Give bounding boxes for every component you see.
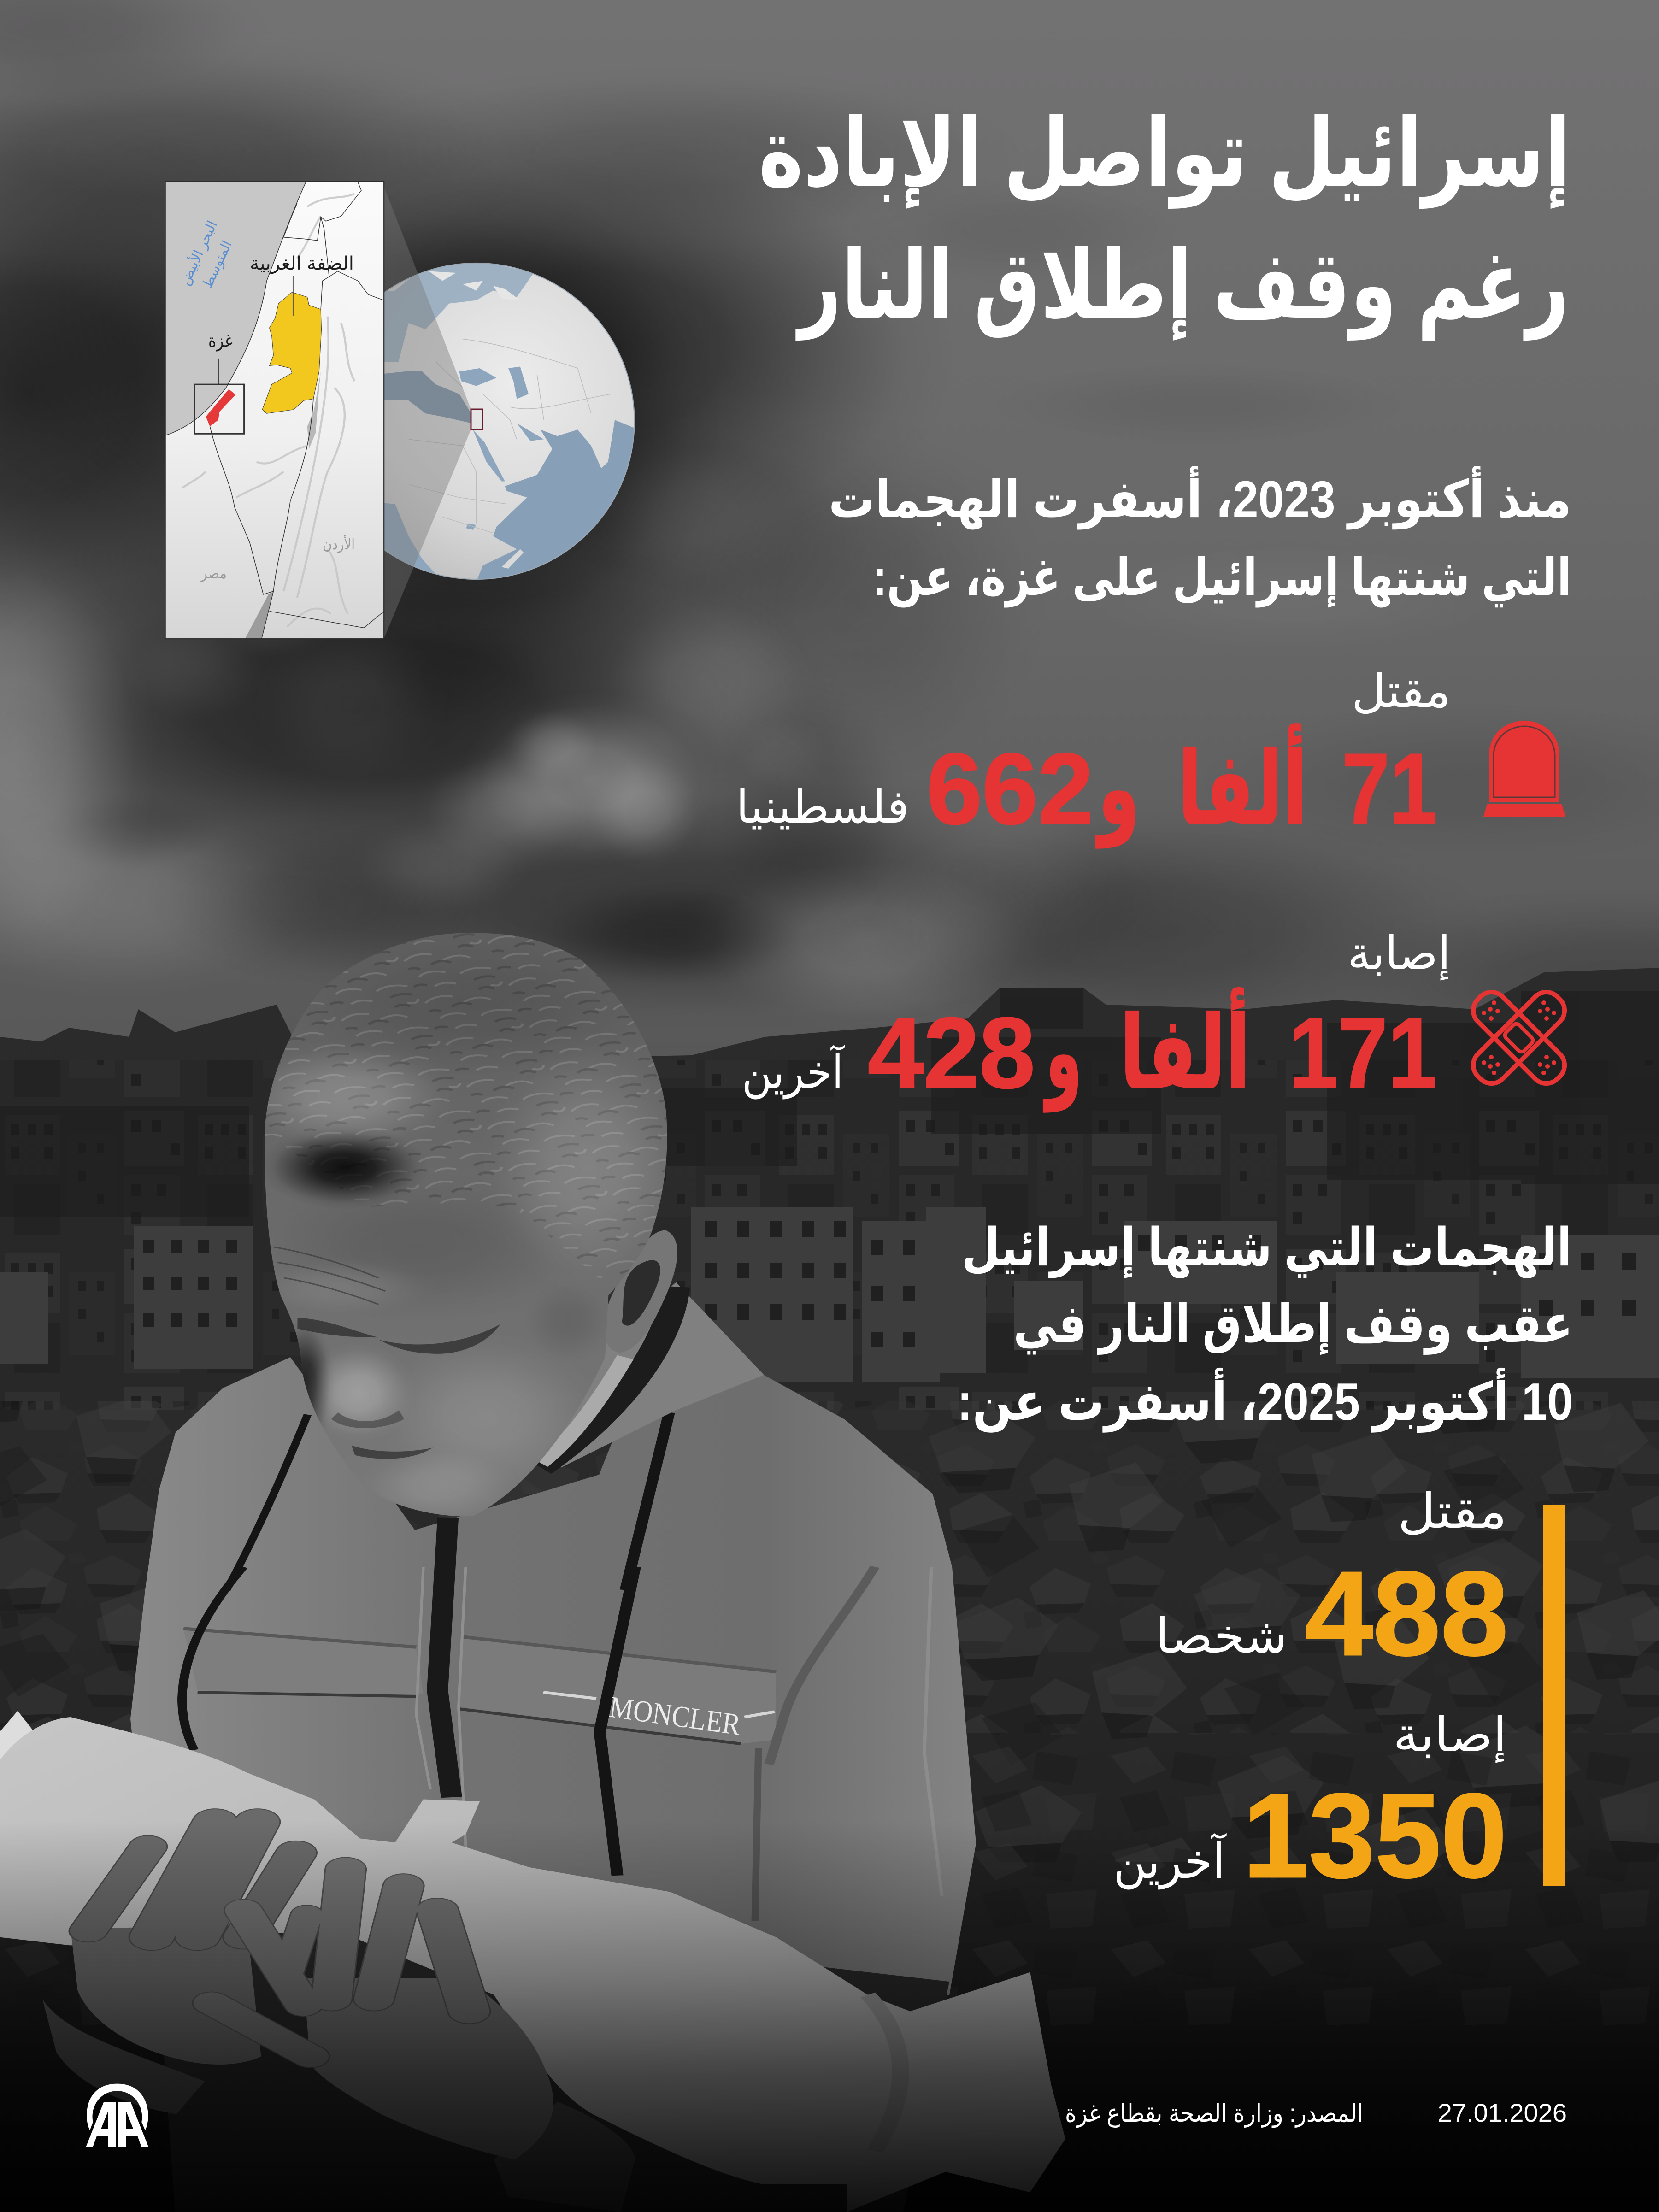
west bank bbox=[262, 292, 322, 413]
locator map and globe: الأردن bbox=[323, 535, 355, 553]
jacket logo text: MONCLER bbox=[607, 1690, 742, 1742]
ceasefire paragraph: 10 أكتوبر 2025، أسفرت عن: bbox=[957, 1367, 1573, 1433]
gaza strip bbox=[206, 389, 235, 426]
stat: injured since 2023 bbox=[742, 928, 1451, 1112]
background: ruined city skyline and camp bbox=[0, 968, 1659, 2212]
stat: killed after ceasefire: شخصا bbox=[1155, 1610, 1288, 1663]
globe shadow bbox=[228, 172, 725, 670]
stat: injured since 2023: آخرين bbox=[742, 1045, 845, 1100]
stat: injured after ceasefire bbox=[1113, 1708, 1507, 1903]
hands bbox=[42, 1822, 635, 2212]
stat: killed after ceasefire: 488 bbox=[1305, 1547, 1508, 1681]
icon: gravestone bbox=[1483, 721, 1565, 817]
head bbox=[230, 925, 764, 1525]
icon: crossed bandages bbox=[1467, 986, 1571, 1090]
date: 27.01.2026 bbox=[1438, 2098, 1567, 2127]
bottom darkening gradient bbox=[0, 1820, 1659, 2212]
stat: injured since 2023: 171 bbox=[1288, 997, 1437, 1109]
stat: injured since 2023: 428 bbox=[868, 997, 1035, 1109]
stat: killed after ceasefire: مقتل bbox=[1398, 1485, 1507, 1538]
globe bbox=[384, 263, 635, 580]
locator map and globe: البحر الأبيض bbox=[176, 218, 220, 288]
logo: Anadolu Agency bbox=[86, 2084, 149, 2147]
person: man holding wrapped child bbox=[0, 925, 1065, 2212]
intro paragraph bbox=[829, 466, 1571, 608]
source: المصدر: وزارة الصحة بقطاع غزة bbox=[1065, 2100, 1363, 2128]
forehead wrinkles bbox=[274, 1247, 385, 1304]
locator map and globe: المتوسط bbox=[200, 238, 235, 291]
map panel bbox=[165, 181, 384, 639]
title bbox=[759, 100, 1571, 341]
stat: injured after ceasefire: آخرين bbox=[1113, 1833, 1227, 1890]
gaza marker on globe bbox=[471, 409, 482, 429]
stat: injured since 2023: ألفا bbox=[1120, 988, 1250, 1109]
intro paragraph: منذ أكتوبر 2023، أسفرت الهجمات bbox=[829, 466, 1571, 529]
jacket bbox=[130, 1282, 976, 2212]
stat: killed after ceasefire bbox=[1155, 1485, 1508, 1681]
stat: killed since 2023: 71 bbox=[1342, 733, 1437, 845]
building windows bbox=[143, 1221, 1636, 1347]
stat: injured after ceasefire: إصابة bbox=[1393, 1708, 1507, 1763]
ceasefire paragraph bbox=[957, 1218, 1573, 1433]
zoom wedge bbox=[384, 187, 471, 639]
stat: killed since 2023: مقتل bbox=[1352, 665, 1451, 717]
background: smoke sky bbox=[0, 0, 1659, 1152]
map labels: الضفة الغربية bbox=[250, 253, 354, 274]
wrapped child bbox=[0, 1711, 1065, 2212]
stat: killed since 2023: ألفا bbox=[1177, 724, 1307, 845]
locator map and globe bbox=[165, 181, 647, 639]
stat: killed since 2023: فلسطينيا bbox=[736, 781, 909, 833]
stat: injured since 2023: و bbox=[1043, 997, 1082, 1112]
orange divider bar bbox=[1543, 1505, 1565, 1886]
stat: killed since 2023 bbox=[736, 665, 1451, 848]
stat: killed since 2023: و bbox=[1095, 733, 1140, 848]
stat: injured since 2023: إصابة bbox=[1347, 928, 1451, 981]
locator map and globe: غزة bbox=[208, 331, 233, 352]
stat: killed since 2023: 662 bbox=[926, 733, 1094, 845]
locator map and globe: مصر bbox=[200, 565, 227, 582]
stat: injured after ceasefire: 1350 bbox=[1243, 1769, 1507, 1903]
eye, nose and mouth shading bbox=[297, 1318, 500, 1459]
